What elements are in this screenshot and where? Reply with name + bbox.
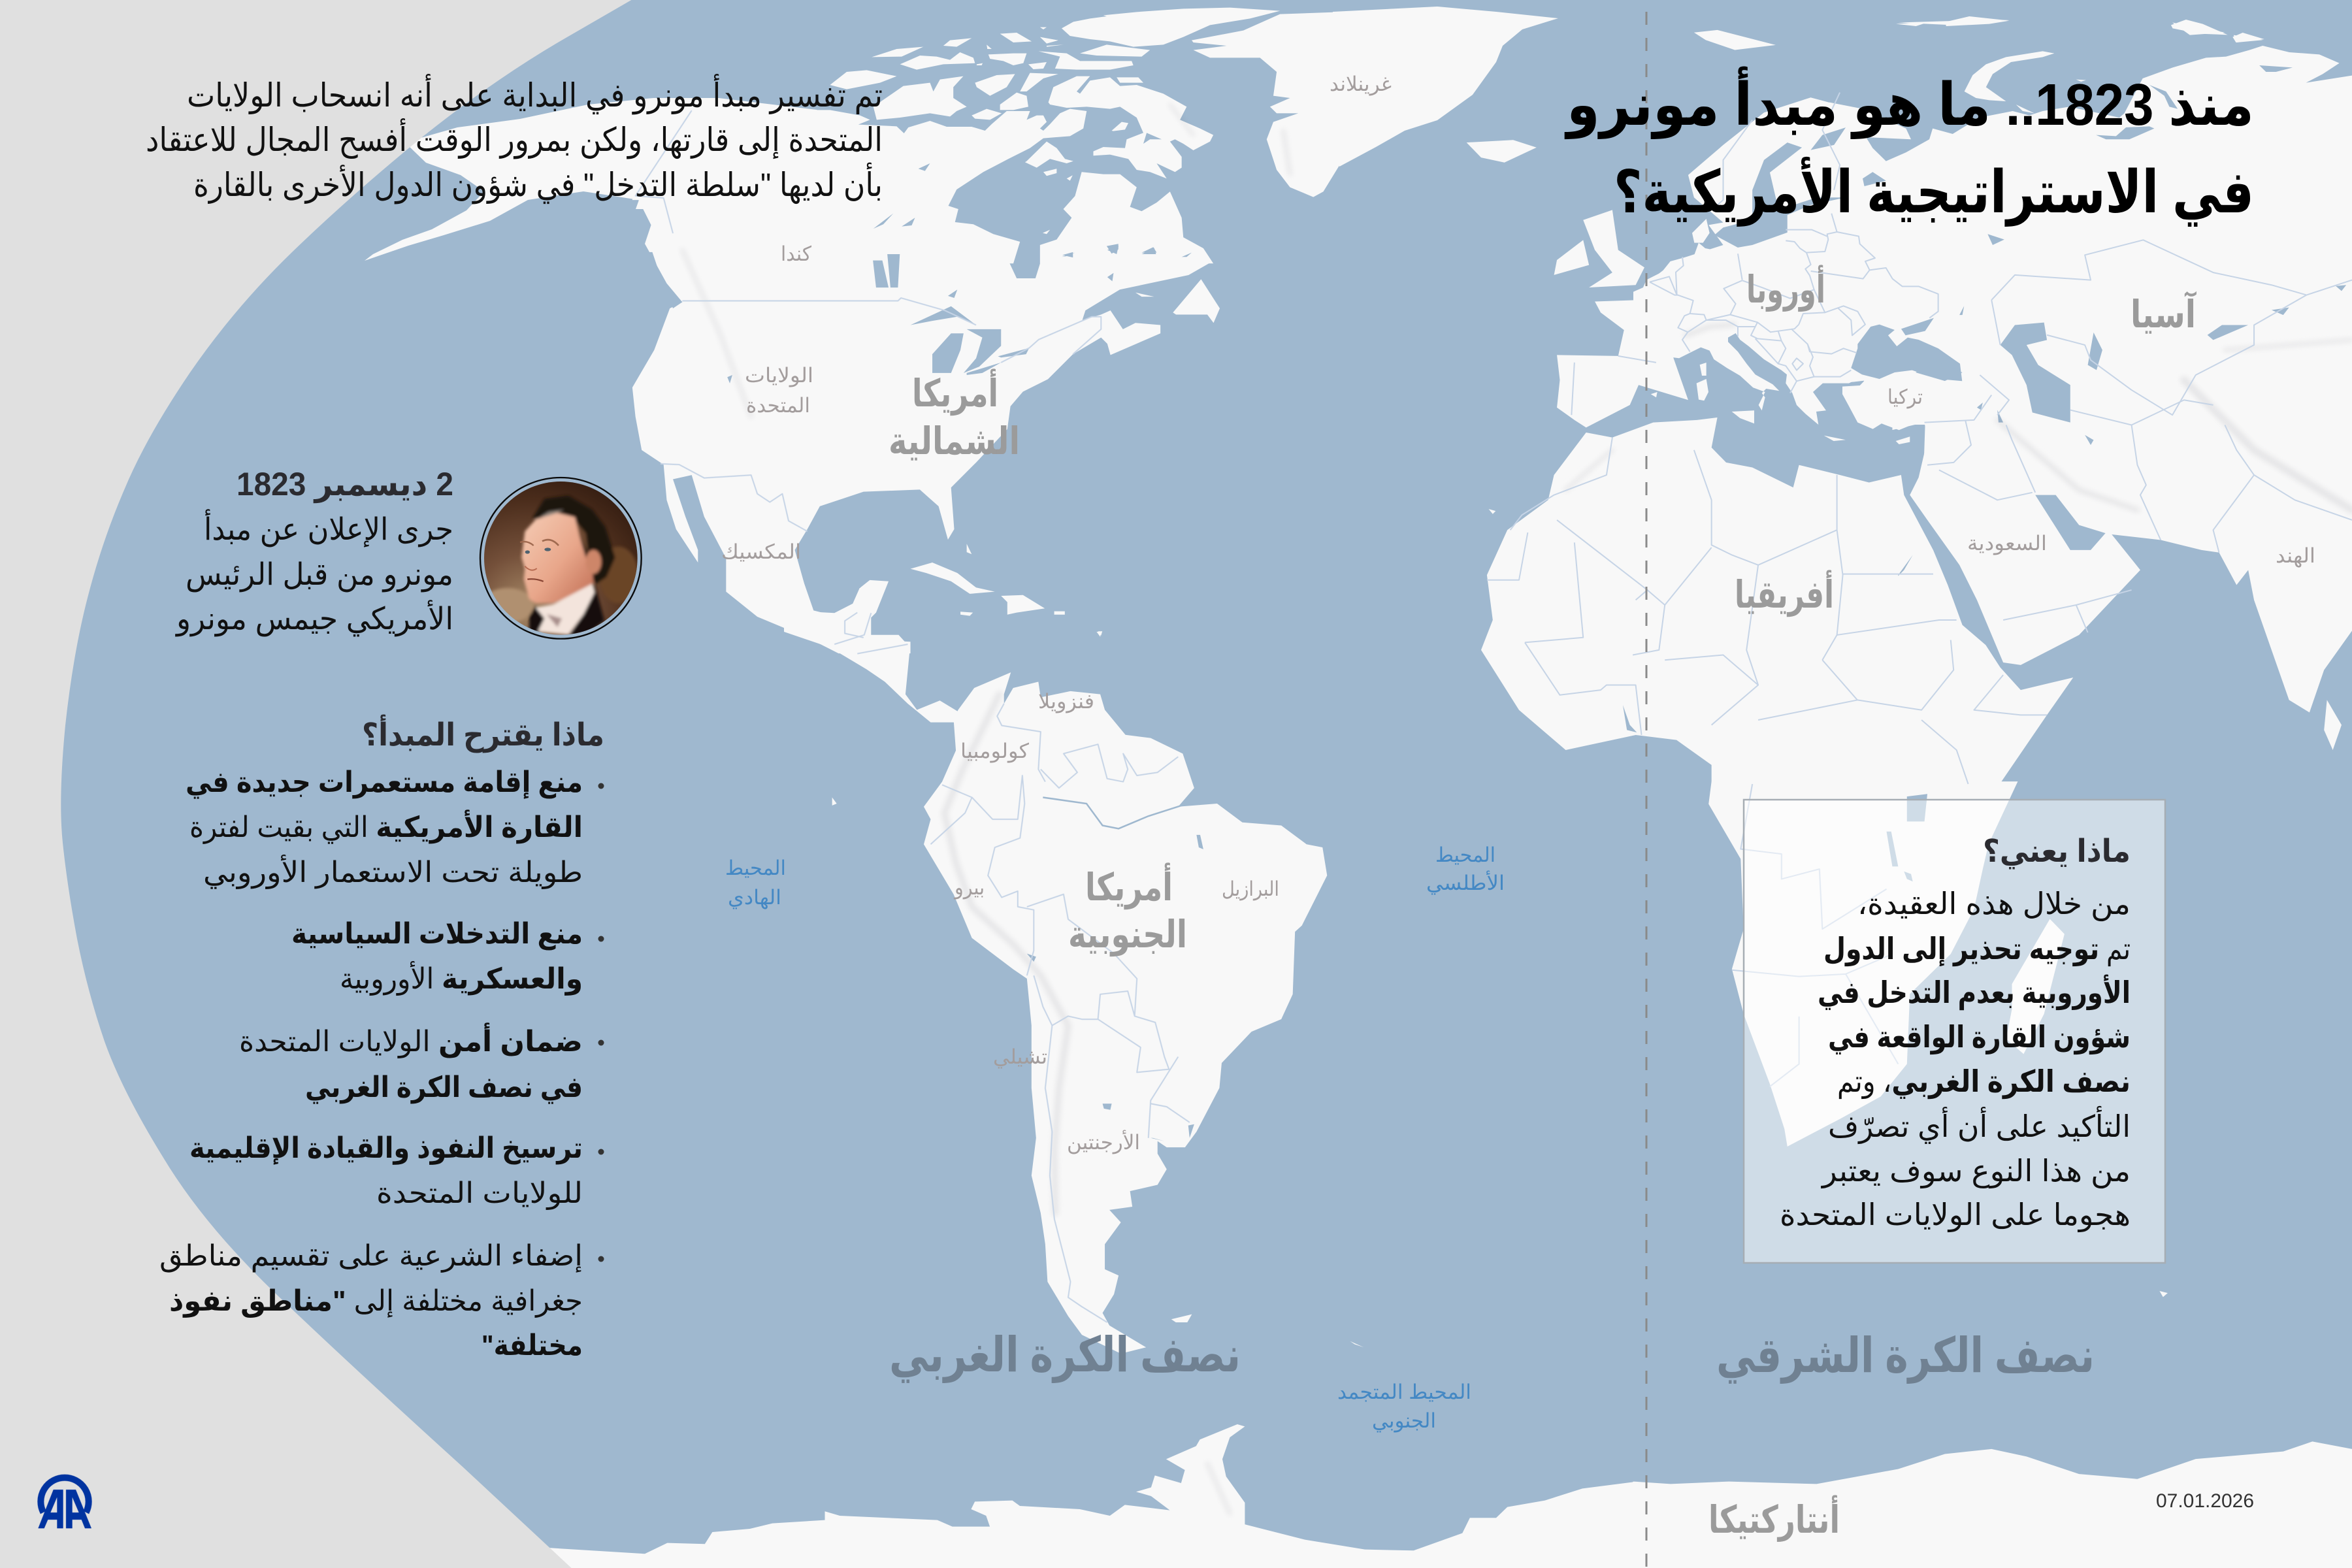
land: Antarctica — [540, 1291, 2352, 1568]
ocean labels: المحيط — [1435, 843, 1495, 866]
meridian dashed line — [1645, 0, 1648, 1568]
portrait: James Monroe — [479, 477, 642, 640]
bullet 4 — [189, 1132, 604, 1210]
black sea — [1851, 325, 1962, 381]
novaya zemlya — [1965, 51, 2054, 101]
country labels: الأرجنتين — [1067, 1130, 1140, 1154]
country labels: بيرو — [953, 876, 985, 900]
panel body — [1780, 887, 2131, 1233]
bullet 4: ترسيخ النفوذ والقيادة الإقليمية — [189, 1132, 583, 1165]
british isles — [1583, 210, 1644, 287]
panel body: هجوما على الولايات المتحدة — [1780, 1198, 2131, 1233]
intro text block — [146, 74, 883, 204]
country labels: البرازيل — [1222, 877, 1279, 901]
bullet 5: إضفاء الشرعية على تقسيم مناطق — [159, 1240, 583, 1273]
date callout — [175, 466, 453, 637]
canadian arctic islands — [1020, 73, 1058, 91]
bullet 1: طويلة تحت الاستعمار الأوروبي — [203, 854, 583, 889]
bullet 3: ضمان أمن الولايات المتحدة — [239, 1022, 583, 1058]
coat — [529, 606, 544, 636]
country labels: كندا — [781, 242, 811, 265]
panel body: التأكيد على أن أي تصرّف — [1828, 1105, 2131, 1145]
iceland — [1467, 140, 1537, 163]
date body: مونرو من قبل الرئيس — [186, 557, 453, 593]
country labels: تشيلي — [993, 1045, 1047, 1069]
hemisphere label: eastern: نصف الكرة الشرقي — [1716, 1328, 2095, 1384]
country labels: المتحدة — [746, 394, 810, 417]
intro text block: المتحدة إلى قارتها، ولكن بمرور الوقت أفسح المجال للاعتقاد — [146, 118, 883, 159]
water: inland seas of Asia and the Baltic — [1714, 127, 2346, 445]
logo: AA — [38, 1478, 91, 1528]
continent labels: أمريكا — [912, 368, 998, 416]
continent labels — [889, 265, 2197, 1542]
bullet 5 — [159, 1240, 604, 1362]
date body: الأمريكي جيمس مونرو — [175, 599, 453, 637]
land: Central America — [784, 588, 960, 723]
hemisphere label: western: نصف الكرة الغربي — [889, 1328, 1241, 1383]
svalbard — [1694, 30, 1776, 50]
land: Europe — [1633, 196, 1962, 457]
panel background — [1744, 800, 2165, 1263]
country borders — [636, 93, 2352, 1322]
bullet 5: مختلفة" — [482, 1330, 583, 1362]
panel body: من هذا النوع سوف يعتبر — [1821, 1154, 2131, 1189]
bullet 3 — [239, 1022, 604, 1104]
date heading: 2 ديسمبر 1823 — [237, 466, 453, 504]
sri lanka — [2324, 700, 2342, 750]
water: lakes in Canada — [1143, 133, 1162, 144]
ocean labels — [725, 843, 1505, 1433]
bullet 3: في نصف الكرة الغربي — [305, 1071, 583, 1104]
panel: what does it mean — [1744, 800, 2165, 1263]
country labels: الولايات — [745, 364, 813, 387]
continent labels: الشمالية — [889, 420, 1020, 463]
date body: جرى الإعلان عن مبدأ — [204, 509, 453, 547]
country labels: السعودية — [1967, 532, 2047, 555]
section heading: ماذا يقترح المبدأ؟ — [362, 714, 604, 753]
continent labels: أفريقيا — [1735, 570, 1834, 617]
panel body: من خلال هذه العقيدة، — [1857, 887, 2131, 922]
water: african lakes — [1907, 794, 1927, 821]
corsica, sardinia, sicily, balearics, crete, cyprus — [1700, 363, 1707, 376]
country labels: كولومبيا — [960, 740, 1029, 763]
face — [521, 513, 593, 603]
country labels: غرينلاند — [1330, 73, 1392, 96]
baffin island — [1049, 76, 1213, 178]
cravat — [536, 583, 595, 635]
water: gulfs of Russia — [2096, 126, 2154, 139]
ocean labels: الأطلسي — [1426, 870, 1505, 895]
terrain relief — [682, 105, 2352, 1514]
panel body: نصف الكرة الغربي، وتم — [1837, 1064, 2131, 1100]
bullet 2: منع التدخلات السياسية — [291, 918, 583, 951]
ocean labels: الجنوبي — [1372, 1409, 1436, 1433]
southampton island — [1025, 142, 1073, 168]
cuba and caribbean islands — [911, 563, 995, 594]
land: Africa — [1481, 417, 2073, 1147]
land: Greenland — [1192, 12, 1339, 197]
continent labels: أمريكا — [1085, 862, 1173, 910]
country labels: تركيا — [1887, 385, 1923, 409]
bullet 5: جغرافية مختلفة إلى "مناطق نفوذ — [169, 1285, 583, 1318]
ocean labels: المحيط المتجمد — [1337, 1380, 1471, 1403]
continent labels: الجنوبية — [1068, 913, 1187, 957]
intro text block: تم تفسير مبدأ مونرو في البداية على أنه انسحاب الولايات — [187, 74, 883, 115]
title: منذ 1823.. ما هو مبدأ مونرو — [1564, 66, 2254, 140]
date stamp: 07.01.2026 — [2156, 1490, 2254, 1512]
land: North America — [365, 7, 1558, 723]
ear — [585, 550, 601, 574]
panel: what the doctrine proposes — [159, 714, 604, 1362]
country labels: فنزويلا — [1038, 690, 1094, 713]
water: James Bay and Great Lakes — [911, 306, 976, 325]
country labels: المكسيك — [721, 540, 801, 563]
bullet 4: للولايات المتحدة — [376, 1177, 583, 1210]
ocean labels: الهادي — [728, 886, 781, 909]
portrait background glow — [599, 547, 638, 603]
continent labels: أوروبا — [1746, 265, 1825, 312]
bullet 1: القارة الأمريكية التي بقيت لفترة — [189, 809, 583, 844]
country labels — [721, 73, 2315, 1154]
bullet 1 — [186, 766, 604, 889]
panel body: شؤون القارة الواقعة في — [1828, 1020, 2131, 1054]
panel body: الأوروبية بعدم التدخل في — [1818, 974, 2131, 1010]
intro text block: بأن لديها "سلطة التدخل" في شؤون الدول الأخرى بالقارة — [193, 162, 883, 204]
continent labels: أنتاركتيكا — [1708, 1495, 1840, 1542]
ocean labels: المحيط — [725, 857, 786, 879]
country labels: الهند — [2276, 544, 2315, 568]
panel body: تم توجيه تحذير إلى الدول — [1823, 932, 2131, 967]
date body — [175, 509, 453, 637]
facial features — [520, 540, 559, 581]
land: Eurasia — [1467, 16, 2352, 750]
panel heading: ماذا يعني؟ — [1983, 834, 2131, 870]
bullet 2: والعسكرية الأوروبية — [340, 960, 583, 996]
continent labels: آسيا — [2131, 291, 2197, 336]
bullet 2 — [291, 918, 604, 996]
bullet 1: منع إقامة مستعمرات جديدة في — [186, 766, 583, 799]
title — [1564, 66, 2254, 227]
hair — [532, 495, 615, 583]
land: South America — [832, 632, 1364, 1354]
